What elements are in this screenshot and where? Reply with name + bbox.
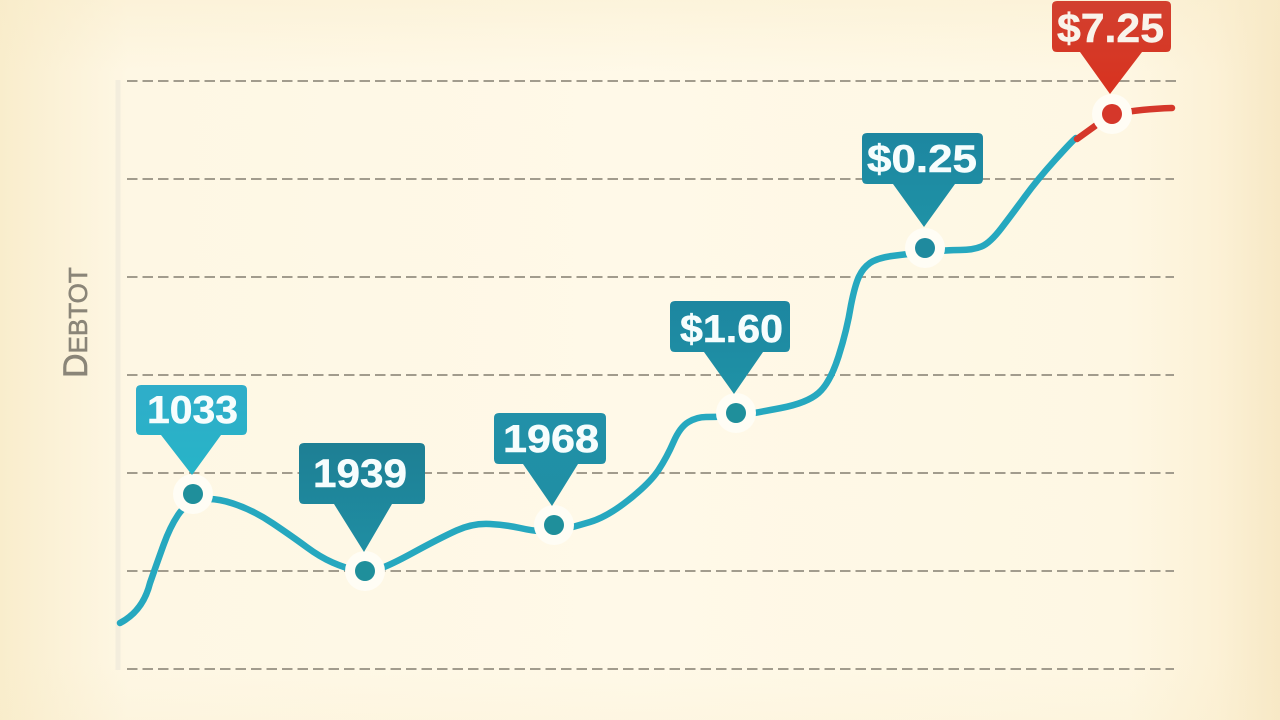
y axis bbox=[116, 80, 120, 670]
data point 3 bbox=[534, 505, 574, 545]
data point 2 bbox=[345, 551, 385, 591]
callout: $1.60: $1.60 bbox=[680, 308, 783, 351]
callout: $0.25 bbox=[862, 133, 983, 227]
callout: 1968 bbox=[494, 413, 606, 506]
callout: $0.25: $0.25 bbox=[867, 138, 977, 181]
callout: 1939: 1939 bbox=[313, 452, 407, 496]
callout: 1939 bbox=[299, 443, 425, 552]
y axis label: DEBTOT bbox=[57, 267, 95, 378]
callout: 1968: 1968 bbox=[503, 418, 599, 461]
callout: 1033 bbox=[136, 385, 247, 475]
data point 1 bbox=[173, 474, 213, 514]
callout: 1033: 1033 bbox=[147, 389, 238, 432]
callout: $1.60 bbox=[670, 301, 790, 394]
chart grid bbox=[127, 81, 1178, 669]
teal line series bbox=[120, 108, 1172, 623]
callout: $7.25: $7.25 bbox=[1057, 5, 1164, 51]
data point 4 bbox=[716, 393, 756, 433]
data point 5 bbox=[905, 228, 945, 268]
red line series bbox=[1077, 108, 1172, 139]
callout: $7.25 bbox=[1052, 1, 1171, 94]
data point 6 bbox=[1092, 94, 1132, 134]
